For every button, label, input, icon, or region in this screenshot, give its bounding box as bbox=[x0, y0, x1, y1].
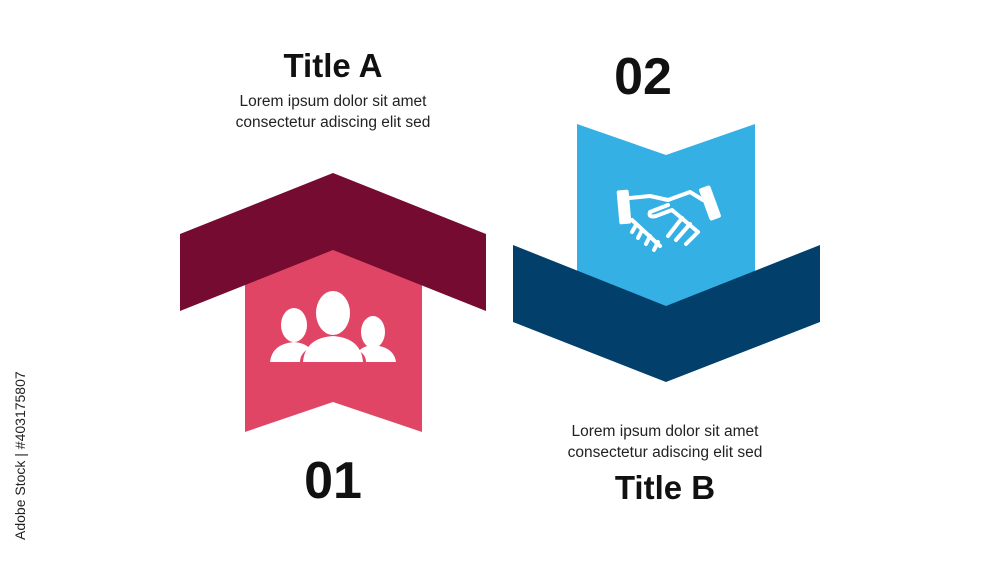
title B: Title B bbox=[615, 469, 715, 506]
text B bbox=[568, 423, 762, 461]
pink banner bbox=[245, 250, 422, 432]
light blue banner bbox=[577, 124, 755, 320]
number 01: 01 bbox=[304, 452, 362, 510]
text B: consectetur adiscing elit sed bbox=[568, 444, 762, 461]
text B: Lorem ipsum dolor sit amet bbox=[572, 423, 758, 440]
text A bbox=[236, 93, 430, 131]
vertical stock id: Adobe Stock | #403175807 bbox=[12, 371, 28, 540]
number 02: 02 bbox=[614, 48, 672, 106]
text A: consectetur adiscing elit sed bbox=[236, 114, 430, 131]
icon: handshake bbox=[619, 188, 719, 250]
navy chevron bbox=[513, 245, 820, 382]
title A: Title A bbox=[283, 47, 383, 84]
text A: Lorem ipsum dolor sit amet bbox=[240, 93, 426, 110]
maroon chevron bbox=[180, 173, 486, 311]
icon: people bbox=[270, 291, 396, 362]
